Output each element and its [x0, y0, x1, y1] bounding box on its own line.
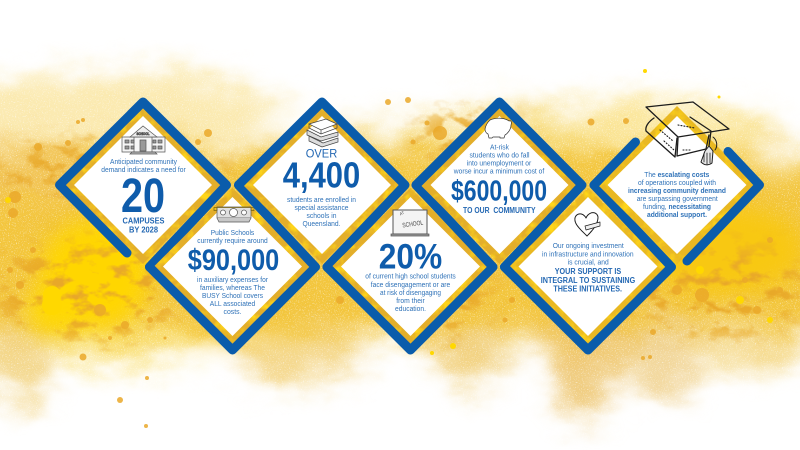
text: students enrolled: special assistance: [294, 203, 348, 212]
text: your support is integral: THESE INITIATIVES.: [553, 284, 622, 294]
text: anticipated demand: [101, 157, 186, 174]
blue frame segment: [238, 102, 405, 267]
text: your support is integral: INTEGRAL TO SUSTAINING: [541, 276, 635, 285]
number: $600,000: $600,000: [451, 176, 547, 208]
number: 20%: 20%: [379, 237, 442, 276]
blue frame segment: [150, 185, 316, 350]
panel: 20 campuses: [60, 102, 226, 267]
text: anticipated demand: demand indicates a need for: [101, 165, 186, 174]
text: auxiliary expenses: ALL associated: [210, 299, 255, 308]
paint splatters: [7, 97, 783, 428]
text: at-risk students: into unemployment or: [467, 158, 532, 167]
text: auxiliary expenses: BUSY School covers: [202, 291, 263, 300]
panel: your support: [504, 185, 672, 350]
text: auxiliary expenses: costs.: [224, 307, 242, 316]
icon: school building: [122, 126, 165, 154]
text: ongoing investment: is crucial, and: [568, 258, 609, 266]
blue frame segment: [60, 102, 226, 267]
icon: heart with bandage: [575, 213, 600, 236]
blue frame segment: [594, 142, 760, 261]
text: campuses by 2028: CAMPUSES: [122, 216, 165, 226]
text: escalating costs: The escalating costs: [644, 170, 709, 179]
mottled orange paint texture: [0, 110, 800, 340]
text: students enrolled: [287, 195, 356, 228]
text: ongoing investment: [542, 241, 634, 266]
panel: $600,000: [416, 102, 582, 267]
blue frame segment: [327, 185, 493, 350]
text: auxiliary expenses: [197, 275, 268, 316]
text: public schools: [197, 228, 268, 245]
text: escalating costs: of operations coupled with: [638, 178, 716, 187]
text: disengagement: face disengagement or are: [371, 280, 450, 289]
text: ongoing investment: in infrastructure and innovation: [542, 250, 634, 258]
text: escalating costs: funding, necessitating: [643, 202, 711, 211]
text: escalating costs: [628, 170, 726, 219]
panel: $90,000: [150, 185, 316, 350]
text: campuses by 2028: [122, 216, 165, 234]
text: auxiliary expenses: in auxiliary expenses for: [197, 275, 268, 284]
text: at-risk students: At-risk: [490, 142, 509, 152]
icon: piggy bank: [485, 118, 511, 138]
text: escalating costs: are surpassing government: [637, 194, 718, 203]
text: at-risk students: worse incur a minimum cost of: [453, 166, 545, 176]
icon: stack of books: [307, 119, 338, 147]
icon: laptop with school text: SCHOOL: [402, 220, 424, 229]
text: public schools: currently require around: [197, 236, 268, 245]
text: disengagement: from their: [396, 296, 425, 305]
text: anticipated demand: Anticipated community: [110, 157, 177, 166]
text: disengagement: of current high school students: [365, 272, 456, 281]
text: escalating costs: additional support.: [647, 210, 707, 219]
text: at-risk students: [453, 142, 545, 176]
icon: banknotes: [214, 207, 254, 222]
text: at-risk students: students who do fall: [470, 150, 530, 159]
text: disengagement: [365, 272, 456, 313]
panel: escalating costs: [594, 102, 760, 264]
panel: over 4,400: [238, 102, 405, 267]
text: campuses by 2028: BY 2028: [129, 226, 159, 234]
icon: school building: SCHOOL: [136, 131, 150, 136]
panel: 20%: [327, 185, 493, 350]
text: students enrolled: Queensland.: [302, 219, 340, 228]
icon: laptop with school text: AT: [399, 210, 406, 216]
text: public schools: Public Schools: [211, 228, 254, 237]
text: auxiliary expenses: families, whereas The: [200, 283, 265, 292]
text: your support is integral: YOUR SUPPORT IS: [555, 267, 622, 276]
icon: graduation cap: [646, 102, 729, 165]
text: over: OVER: [306, 148, 337, 160]
text: escalating costs: increasing community demand: [628, 186, 726, 195]
number: 4,400: 4,400: [283, 154, 360, 195]
text: ongoing investment: Our ongoing investment: [553, 241, 624, 250]
number: $90,000: $90,000: [188, 244, 279, 277]
text: your support is integral: [541, 267, 635, 294]
icon: laptop with school text: [391, 210, 429, 236]
blue frame segment: [416, 102, 582, 267]
text: students enrolled: schools in: [306, 211, 336, 220]
text: disengagement: at risk of disengaging: [380, 288, 441, 297]
text: students enrolled: students are enrolled in: [287, 195, 356, 204]
number: 20: 20: [121, 170, 165, 223]
blue frame segment: [504, 185, 672, 350]
text: disengagement: education.: [395, 304, 426, 313]
text: to our community: TO OUR COMMUNITY: [463, 206, 536, 215]
